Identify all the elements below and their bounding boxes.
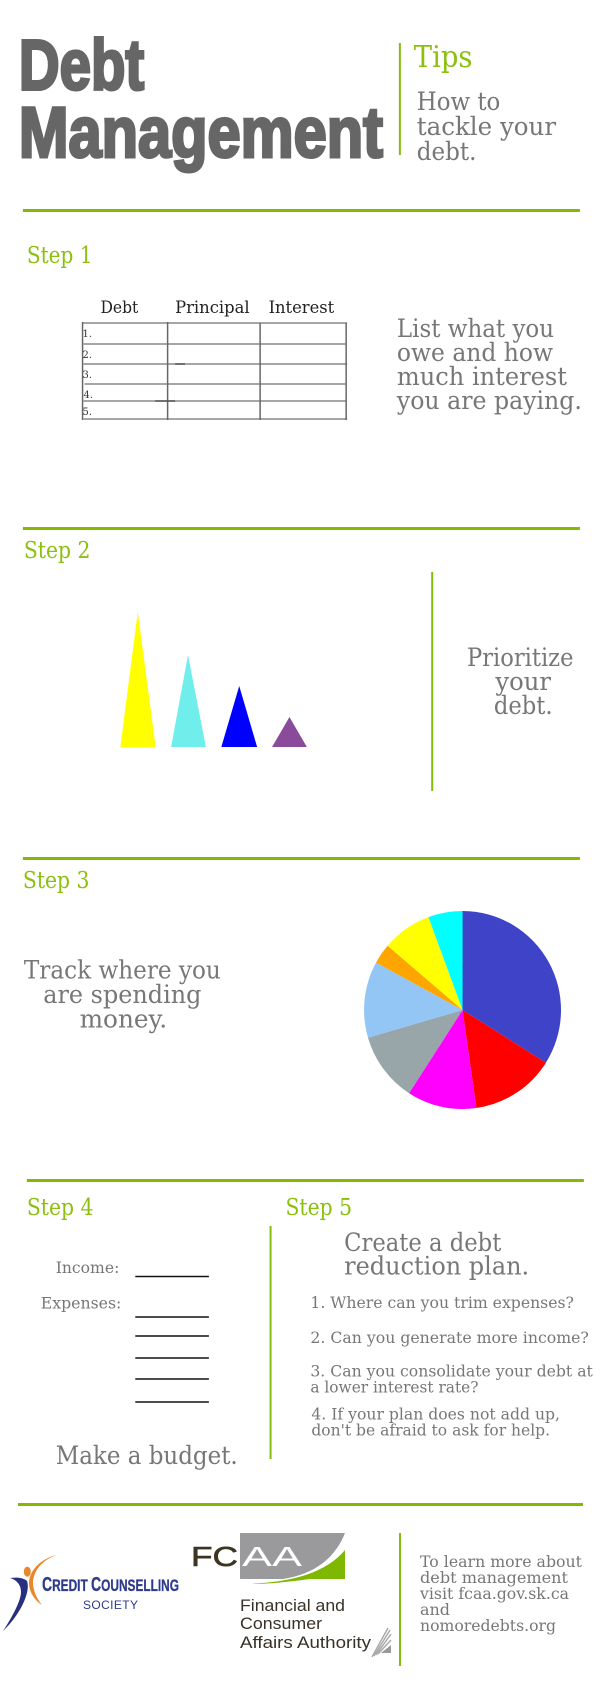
purple triangle	[272, 717, 307, 747]
table row numbers: 3.	[83, 370, 92, 381]
table row numbers: 1.	[83, 329, 92, 340]
step 4 heading: Step 4	[27, 1195, 94, 1221]
table row numbers: 5.	[83, 407, 92, 418]
step 5 list	[310, 1293, 593, 1440]
expenses label: Expenses:	[41, 1293, 121, 1313]
step 5 list: 3. Can you consolidate your debt at	[310, 1361, 593, 1381]
fcaa green swoosh	[248, 1550, 345, 1584]
fcaa white letters: AA	[242, 1541, 303, 1572]
section rule 1	[23, 209, 580, 212]
step 1 text: you are paying.	[396, 386, 582, 415]
table row numbers: 4.	[84, 390, 93, 401]
footer text: and	[420, 1600, 450, 1619]
footer text: To learn more about	[420, 1552, 583, 1571]
step 2 text: debt.	[494, 691, 553, 720]
footer text: debt management	[420, 1568, 569, 1587]
fcaa name: Consumer	[240, 1614, 322, 1633]
income label: Income:	[56, 1258, 119, 1277]
logo sub-wordmark: SOCIETY	[83, 1598, 138, 1612]
step 3 text: money.	[80, 1004, 167, 1034]
footer text: nomoredebts.org	[420, 1616, 556, 1635]
table row numbers: 2.	[83, 350, 92, 361]
logo wordmark: CREDIT COUNSELLING	[42, 1574, 179, 1596]
fcaa name	[240, 1596, 372, 1652]
icon: fan mark	[372, 1628, 391, 1657]
blue triangle	[221, 686, 257, 747]
step 2 text: your	[494, 667, 551, 696]
title: Management	[19, 94, 383, 173]
step 5 heading: Step 5	[285, 1195, 352, 1221]
yellow triangle	[120, 612, 156, 747]
subtitle: tips: Tips	[414, 40, 472, 75]
table column headers: Principal	[175, 297, 250, 317]
panel: step 5	[285, 1195, 593, 1440]
subtitle: how to tackle your debt: tackle your	[417, 112, 556, 141]
pie chart	[364, 911, 561, 1109]
step 3 heading: Step 3	[23, 868, 90, 894]
step 2 text: Prioritize	[467, 643, 573, 672]
fcaa name: Financial and	[240, 1596, 345, 1615]
step 5 title: reduction plan.	[344, 1251, 529, 1281]
footer text	[419, 1552, 583, 1635]
table grid	[83, 322, 347, 420]
step 2 divider	[431, 572, 433, 791]
step 3 text: Track where you	[24, 955, 221, 985]
step 2 text	[467, 643, 573, 720]
footer divider	[399, 1533, 401, 1666]
title: Debt	[19, 26, 144, 106]
section rule 2	[23, 527, 580, 530]
title	[19, 26, 383, 173]
step 5 list: 1. Where can you trim expenses?	[310, 1293, 574, 1312]
step 1 heading: Step 1	[27, 243, 93, 269]
subtitle: how to tackle your debt	[417, 87, 556, 166]
fcaa letters: FC	[191, 1541, 238, 1572]
panel: step 4	[27, 1195, 238, 1470]
table column headers	[100, 297, 334, 317]
table row numbers	[83, 329, 93, 418]
step 5 list: 4. If your plan does not add up,	[311, 1404, 560, 1424]
step 3 text	[24, 955, 221, 1034]
step 5 list: 2. Can you generate more income?	[310, 1328, 589, 1347]
fcaa badge	[240, 1533, 345, 1579]
section rule 5	[18, 1503, 583, 1506]
logo: fcaa	[191, 1533, 391, 1657]
table column headers: Interest	[269, 297, 334, 317]
fcaa name: Affairs Authority	[240, 1633, 372, 1652]
table column headers: Debt	[100, 297, 138, 317]
step 5 title	[344, 1228, 529, 1281]
section rule 4	[27, 1179, 584, 1182]
header divider	[399, 43, 401, 155]
icon: person figure	[3, 1555, 57, 1631]
debt table	[83, 297, 347, 420]
header	[19, 26, 556, 173]
panel: step 2	[24, 538, 573, 791]
step 5 title: Create a debt	[344, 1228, 501, 1257]
footer	[3, 1533, 583, 1666]
step 5 list: a lower interest rate?	[310, 1377, 478, 1397]
step 1 text	[396, 314, 582, 415]
panel: step 1	[27, 243, 582, 420]
logo: credit counselling society	[3, 1555, 179, 1631]
step 4 text: Make a budget.	[56, 1441, 238, 1470]
step 1 text: owe and how	[397, 338, 553, 367]
step 3 text: are spending	[43, 980, 201, 1009]
section rule 3	[23, 857, 580, 860]
footer text: visit fcaa.gov.sk.ca	[419, 1584, 569, 1603]
subtitle: how to tackle your debt: How to	[417, 87, 500, 116]
step 1 text: much interest	[397, 362, 567, 391]
budget blanks	[135, 1276, 209, 1402]
step 5 list: don't be afraid to ask for help.	[311, 1420, 550, 1440]
step 4-5 divider	[270, 1226, 272, 1459]
panel: step 3	[23, 868, 561, 1109]
cyan triangle	[171, 655, 206, 747]
triangle chart	[120, 612, 307, 747]
step 2 heading: Step 2	[24, 538, 91, 564]
step 1 text: List what you	[397, 314, 554, 343]
subtitle: how to tackle your debt: debt.	[417, 137, 476, 166]
